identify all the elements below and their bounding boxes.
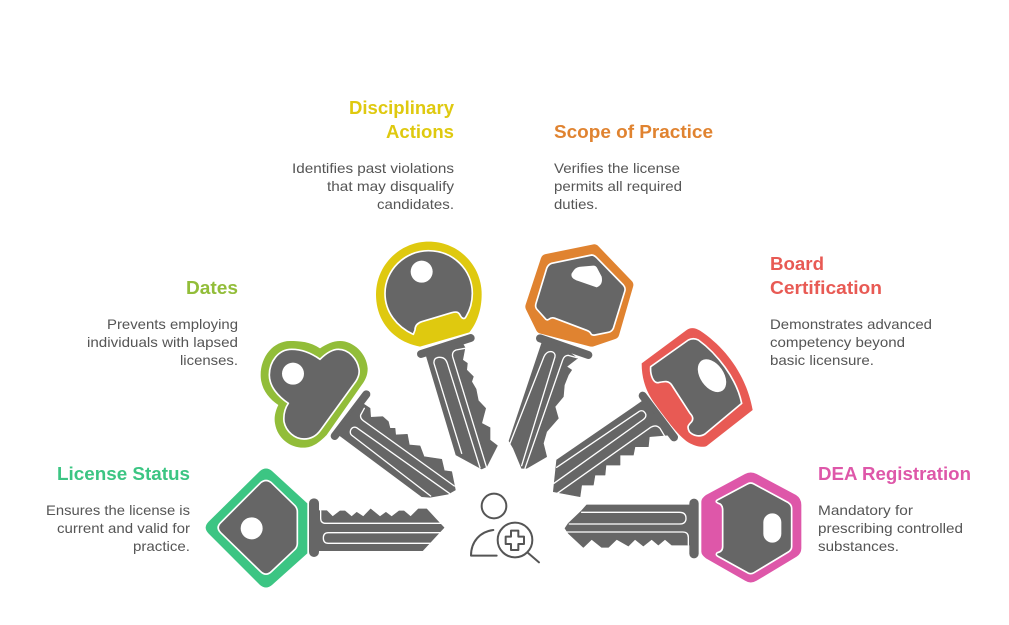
text: dates: [87, 278, 238, 368]
text: scope of practice: [554, 122, 713, 212]
text: license status: practice.: [133, 538, 190, 554]
text: board certification: Certification: [770, 278, 882, 298]
text: license status: License Status: [57, 464, 190, 484]
text: disciplinary actions: candidates.: [377, 196, 454, 212]
text: disciplinary actions: Disciplinary: [349, 98, 454, 118]
text: disciplinary actions: that may disqualify: [327, 178, 454, 194]
text: DEA registration: [818, 464, 971, 554]
text: license status: current and valid for: [57, 520, 190, 536]
text: scope of practice: duties.: [554, 196, 598, 212]
text: DEA registration: prescribing controlled: [818, 520, 963, 536]
text: scope of practice: permits all required: [554, 178, 682, 194]
text: dates: licenses.: [180, 352, 238, 368]
icon: person with magnifier and medical cross: [471, 494, 539, 562]
text: board certification: competency beyond: [770, 334, 905, 350]
text: license status: [46, 464, 190, 554]
text: license status: Ensures the license is: [46, 502, 190, 518]
text: disciplinary actions: [292, 98, 454, 212]
key: DEA registration: [565, 472, 801, 582]
key: license status: [206, 468, 444, 587]
text: DEA registration: substances.: [818, 538, 899, 554]
text: DEA registration: DEA Registration: [818, 464, 971, 484]
key: disciplinary actions: [376, 242, 497, 469]
key: scope of practice: [509, 250, 627, 468]
key: board certification: [553, 328, 753, 497]
text: board certification: [770, 254, 932, 368]
text: dates: Dates: [186, 278, 238, 298]
text: scope of practice: Verifies the license: [554, 160, 680, 176]
text: disciplinary actions: Identifies past violations: [292, 160, 454, 176]
text: scope of practice: Scope of Practice: [554, 122, 713, 142]
text: dates: Prevents employing: [107, 316, 238, 332]
text: board certification: Board: [770, 254, 824, 274]
text: board certification: Demonstrates advanced: [770, 316, 932, 332]
text: disciplinary actions: Actions: [386, 122, 454, 142]
text: DEA registration: Mandatory for: [818, 502, 913, 518]
key: dates: [261, 341, 455, 497]
text: dates: individuals with lapsed: [87, 334, 238, 350]
text: board certification: basic licensure.: [770, 352, 874, 368]
